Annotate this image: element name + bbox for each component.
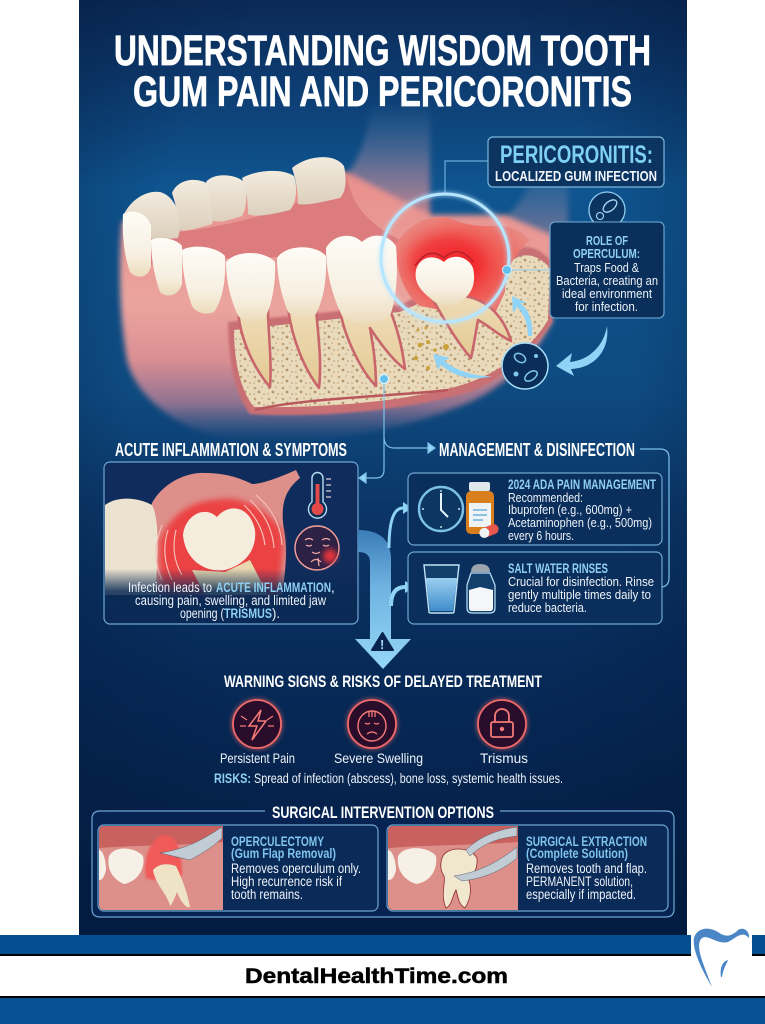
back row teeth <box>124 157 346 239</box>
panel: pain management: Ibuprofen (e.g., 600mg) + <box>508 502 632 517</box>
footer site name: DentalHealthTime.com <box>245 965 508 988</box>
panel: salt water rinses: reduce bacteria. <box>508 600 587 615</box>
icon: bacteria badge <box>589 192 625 228</box>
arrows: bacteria cycle <box>433 296 607 378</box>
callout: role of operculum: Bacteria, creating an <box>556 273 658 288</box>
panel text: ACUTE INFLAMMATION <box>216 580 331 595</box>
premolars and molar crowns <box>226 236 397 324</box>
icon: thermometer <box>308 473 331 518</box>
callout: role of operculum: ideal environment <box>562 286 652 301</box>
connector from bone to sections <box>359 374 669 587</box>
panel: salt water rinses: SALT WATER RINSES <box>508 561 608 576</box>
icon: swollen face <box>295 526 339 570</box>
callout: role of operculum <box>550 222 664 318</box>
panel: pain management <box>408 473 662 545</box>
arrow: flow pipe down with warning: ! <box>380 637 384 652</box>
card: operculectomy: OPERCULECTOMY <box>231 834 324 849</box>
background panel <box>79 0 687 936</box>
label: trismus: Trismus <box>480 750 528 766</box>
icon: clock <box>419 487 463 531</box>
exposed bone <box>234 255 550 407</box>
card: surgical extraction: especially if impacted. <box>526 887 636 902</box>
card: surgical extraction: SURGICAL EXTRACTION <box>526 834 647 849</box>
panel text: opening ( <box>180 606 224 621</box>
callout: pericoronitis <box>488 137 664 187</box>
roots <box>238 296 511 388</box>
card: operculectomy: Removes operculum only. <box>231 861 361 876</box>
callout: role of operculum: Traps Food & <box>574 260 639 275</box>
panel text: TRISMUS <box>224 606 272 621</box>
panel: pain management: Recommended: <box>508 490 583 505</box>
pointer from operculum dot to callout <box>502 266 550 274</box>
title <box>114 27 651 116</box>
panel: salt water rinses: gently multiple times daily to <box>508 587 651 602</box>
gum mass <box>120 172 552 441</box>
card: operculectomy: tooth remains. <box>231 887 303 902</box>
panel: pain management: Acetaminophen (e.g., 500mg) <box>508 515 652 530</box>
panel text: Infection leads to <box>128 580 212 595</box>
callout: role of operculum: for infection. <box>575 299 638 314</box>
card: operculectomy <box>98 825 378 911</box>
bone pink margin <box>228 247 552 415</box>
wisdom tooth crown <box>415 252 474 305</box>
callout: pericoronitis: LOCALIZED GUM INFECTION <box>495 168 657 185</box>
gum and tooth close-up <box>105 463 357 623</box>
focus circle <box>381 194 509 322</box>
footer band <box>0 935 765 1024</box>
food debris and bacteria specks <box>414 326 449 370</box>
arrow: flow pipe down with warning <box>355 502 414 669</box>
illustration: jaw with teeth and impacted wisdom tooth <box>120 100 568 441</box>
inner gum behind back teeth <box>150 172 400 265</box>
heading: management: MANAGEMENT & DISINFECTION <box>439 440 635 460</box>
heading: SURGICAL INTERVENTION OPTIONS <box>272 803 494 822</box>
label: severe swelling: Severe Swelling <box>334 750 423 766</box>
icon: glass of water <box>424 565 459 613</box>
icon: trismus lock <box>478 700 526 748</box>
ghost ramus <box>345 100 568 300</box>
panel text: ). <box>272 606 280 621</box>
icon: salt shaker <box>467 564 495 613</box>
callout: pericoronitis: PERICORONITIS: <box>500 141 653 169</box>
panel text: , <box>331 580 335 595</box>
label: persistent pain: Persistent Pain <box>220 750 295 766</box>
icon: severe swelling <box>348 700 396 748</box>
risks line: RISKS: <box>214 771 251 786</box>
front incisors and canine <box>123 212 225 314</box>
panel: salt water rinses: Crucial for disinfection. Rinse <box>508 574 654 589</box>
card: operculectomy: (Gum Flap Removal) <box>231 846 336 861</box>
panel: pain management: 2024 ADA PAIN MANAGEMENT <box>508 477 657 492</box>
callout line to circle <box>445 161 488 195</box>
nerve canal <box>255 390 448 410</box>
risks line: Spread of infection (abscess), bone loss, systemic health issues. <box>254 771 563 786</box>
heading: acute inflammation: ACUTE INFLAMMATION & SYMPTOMS <box>115 440 347 460</box>
icon: pill bottle <box>466 482 500 539</box>
panel: acute inflammation <box>104 462 358 624</box>
card: surgical extraction: Removes tooth and flap. <box>526 861 647 876</box>
panel: pain management: every 6 hours. <box>508 528 574 543</box>
card: operculectomy: High recurrence risk if <box>231 874 342 889</box>
panel text <box>128 580 335 621</box>
card: surgical extraction <box>387 825 668 911</box>
card: surgical extraction: (Complete Solution) <box>526 846 628 861</box>
callout: role of operculum: OPERCULUM: <box>573 246 640 261</box>
heading: warning signs: WARNING SIGNS & RISKS OF DELAYED TREATMENT <box>224 672 542 691</box>
panel text: causing pain, swelling, and limited jaw <box>135 593 326 608</box>
panel: salt water rinses <box>408 552 662 624</box>
logo: tooth <box>691 928 752 987</box>
icon: bacteria magnifier <box>502 343 548 389</box>
card: surgical extraction: PERMANENT solution, <box>526 874 633 889</box>
icon: persistent pain <box>233 700 281 748</box>
inflamed gum over wisdom tooth <box>396 217 530 320</box>
callout: role of operculum: ROLE OF <box>586 233 628 248</box>
panel: surgical intervention options <box>92 803 674 917</box>
